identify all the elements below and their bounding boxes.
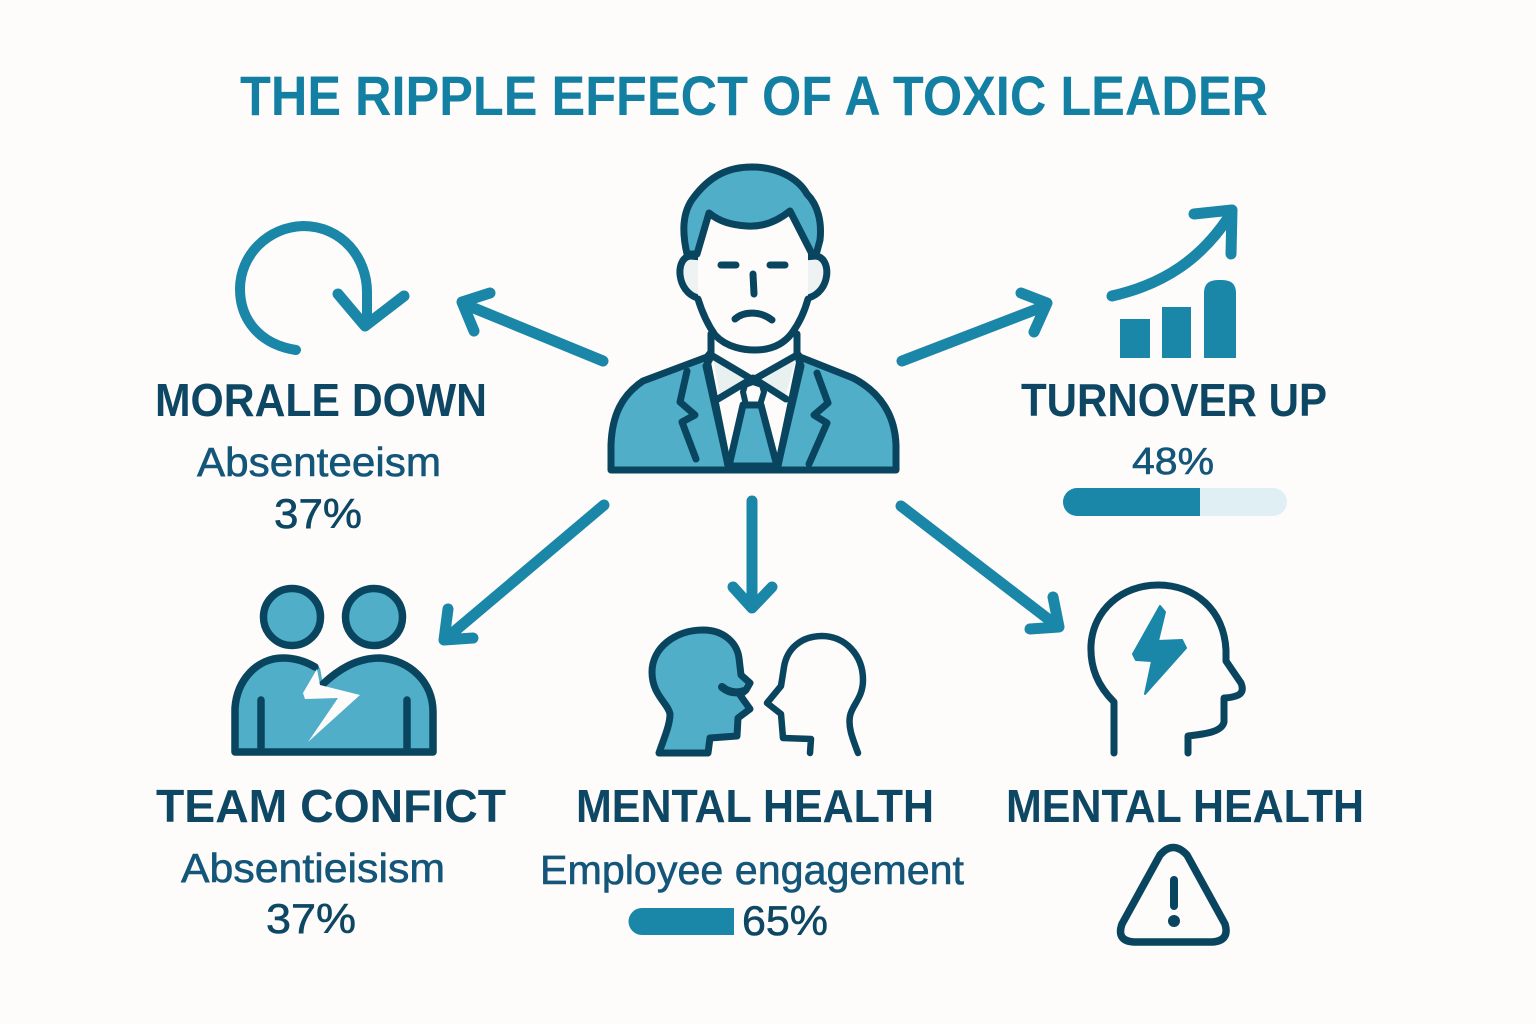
icon: morale circular arrow [240, 226, 404, 350]
arrow: to engagement [733, 501, 772, 608]
number: 37 percent: 37% [266, 895, 356, 942]
icon: turnover chart [1112, 210, 1236, 358]
icon: head with lightning [1091, 585, 1242, 753]
arrow: to morale [462, 293, 603, 361]
progress bar: turnover [1063, 488, 1287, 516]
arrow: to turnover [902, 293, 1047, 361]
heading: team conflict: TEAM CONFICT [156, 780, 506, 832]
heading: morale down: MORALE DOWN [155, 374, 487, 426]
icon: warning triangle [1120, 848, 1226, 942]
number: 37 percent: 37% [274, 490, 362, 537]
title: THE RIPPLE EFFECT OF A TOXIC LEADER [240, 64, 1268, 127]
heading: mental health center: MENTAL HEALTH [576, 780, 934, 832]
text: absenteeism: Absenteeism [197, 439, 441, 485]
heading: turnover up: TURNOVER UP [1021, 374, 1327, 426]
arrow: to team conflict [444, 505, 604, 640]
icon: toxic leader [611, 167, 896, 470]
number: 65 percent: 65% [742, 897, 828, 944]
text: employee engagement: Employee engagement [540, 847, 965, 893]
icon: two faces [652, 630, 863, 753]
heading: mental health right: MENTAL HEALTH [1006, 780, 1364, 832]
number: 48 percent: 48% [1132, 441, 1214, 483]
icon: team conflict [235, 588, 433, 752]
progress bar: engagement [628, 908, 734, 935]
arrow: to mental health [901, 506, 1059, 629]
text: absentieisism: Absentieisism [181, 845, 445, 891]
